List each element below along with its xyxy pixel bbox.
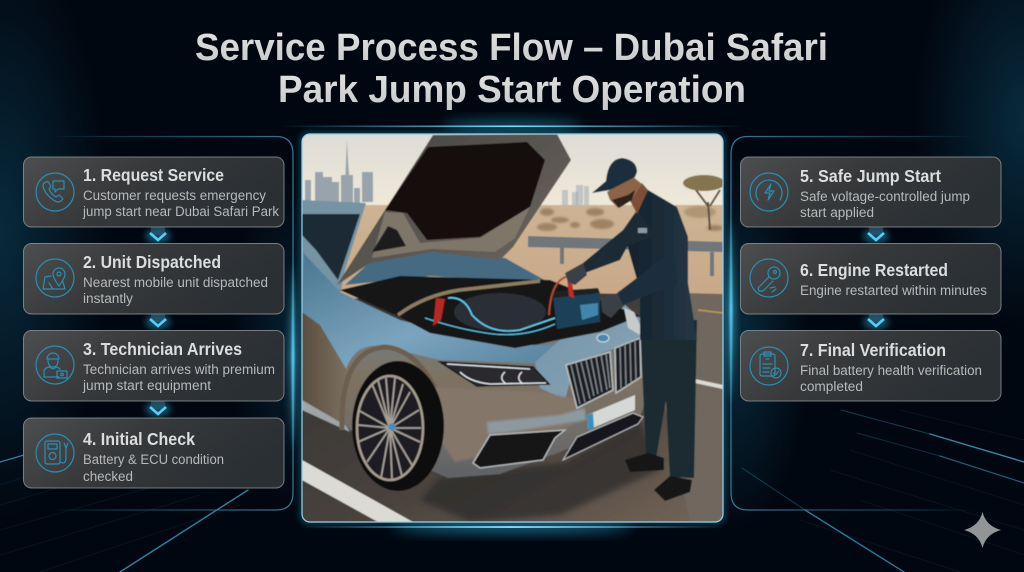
heading: 2. Unit Dispatched xyxy=(83,252,221,272)
card: step 1 request service xyxy=(24,157,284,227)
icon: key xyxy=(750,259,788,297)
photo: technician jump starting BMW in the desert xyxy=(299,131,726,525)
electric arcs xyxy=(425,298,555,335)
hood right side highlight xyxy=(535,305,640,400)
arrow: step 2 to 3 xyxy=(145,314,171,330)
cap xyxy=(592,158,637,193)
heading: 1. Request Service xyxy=(83,165,224,185)
description: jump start near Dubai Safari Park xyxy=(82,204,279,219)
windshield and roof xyxy=(302,200,366,295)
skyline xyxy=(305,140,589,206)
sky xyxy=(302,134,722,206)
car body xyxy=(302,250,646,478)
icon: map pin xyxy=(36,259,74,297)
icon: technician xyxy=(36,346,74,384)
description xyxy=(800,363,982,394)
title: Service Process Flow – Dubai Safari xyxy=(195,27,828,69)
face xyxy=(607,176,642,208)
icon: gauge with bolt xyxy=(750,173,788,211)
BMW badge xyxy=(597,334,609,342)
description xyxy=(82,188,279,219)
description: Safe voltage-controlled jump xyxy=(800,189,970,204)
description: Final battery health verification xyxy=(800,363,982,378)
boots xyxy=(625,453,692,501)
description: Nearest mobile unit dispatched xyxy=(83,275,268,290)
white hood edge xyxy=(624,308,640,335)
red clamp on engine xyxy=(433,298,445,326)
card: step 6 engine restarted xyxy=(740,244,1001,314)
card: step 7 final verification xyxy=(740,330,1001,401)
wheel xyxy=(352,361,444,491)
description: Technician arrives with premium xyxy=(83,362,275,377)
guard rail xyxy=(528,236,723,276)
battery xyxy=(553,288,600,329)
lower air intakes xyxy=(473,413,643,468)
card: step 2 unit dispatched xyxy=(24,244,284,314)
bumper tones xyxy=(433,387,585,462)
arrow: step 1 to 2 xyxy=(145,227,171,244)
title: Park Jump Start Operation xyxy=(278,69,746,111)
fender blue highlight xyxy=(302,254,560,372)
description: completed xyxy=(800,379,863,394)
windshield reflection xyxy=(345,252,550,285)
torso xyxy=(628,187,697,340)
road xyxy=(302,293,723,522)
door side xyxy=(302,312,348,428)
hose xyxy=(398,281,540,315)
grille xyxy=(566,338,641,408)
arrow: step 5 to 6 xyxy=(863,227,889,244)
card: step 4 initial check xyxy=(24,418,284,488)
icon: phone with chat bubble xyxy=(36,173,74,211)
glow line under photo xyxy=(300,520,724,534)
description xyxy=(83,452,224,484)
description xyxy=(800,189,970,220)
title xyxy=(195,27,828,111)
description xyxy=(83,275,268,306)
description: Engine restarted within minutes xyxy=(800,283,987,298)
description: jump start equipment xyxy=(82,378,211,393)
description xyxy=(82,362,275,393)
card: step 3 technician arrives xyxy=(24,330,284,401)
heading: 7. Final Verification xyxy=(800,340,946,360)
heading: 3. Technician Arrives xyxy=(83,339,242,359)
road markings xyxy=(302,379,723,522)
legs xyxy=(640,320,697,478)
neck xyxy=(628,183,648,214)
badge xyxy=(638,228,647,233)
arrow: step 6 to 7 xyxy=(863,314,889,330)
description: Customer requests emergency xyxy=(83,188,266,203)
gloves xyxy=(565,263,622,318)
heading: 5. Safe Jump Start xyxy=(800,166,941,186)
description: checked xyxy=(83,469,133,484)
panel: right frame xyxy=(726,136,975,510)
icon: sparkle watermark xyxy=(964,512,1001,548)
card: step 5 safe jump start xyxy=(740,157,1001,227)
description: instantly xyxy=(83,291,133,306)
icon: clipboard with check xyxy=(750,347,788,385)
engine cover xyxy=(454,293,546,331)
panel: left frame xyxy=(50,136,298,510)
shadow on road xyxy=(420,420,660,522)
tree xyxy=(683,175,725,230)
description: Battery & ECU condition xyxy=(83,452,224,467)
heading: 4. Initial Check xyxy=(83,429,195,449)
icon: multimeter xyxy=(36,434,74,472)
headlight xyxy=(440,362,549,386)
desert xyxy=(302,205,723,300)
glow line under title xyxy=(280,119,744,133)
lower arm xyxy=(616,269,649,305)
upper arm to battery xyxy=(582,212,637,273)
arrow: step 3 to 4 xyxy=(145,401,171,417)
technician xyxy=(565,158,697,501)
red cable and clamp xyxy=(549,276,574,315)
heading: 6. Engine Restarted xyxy=(800,260,948,280)
wheel arch xyxy=(342,347,440,430)
open hood xyxy=(337,134,571,285)
license plate xyxy=(587,395,635,430)
engine bay xyxy=(340,276,640,348)
description: start applied xyxy=(800,205,874,220)
